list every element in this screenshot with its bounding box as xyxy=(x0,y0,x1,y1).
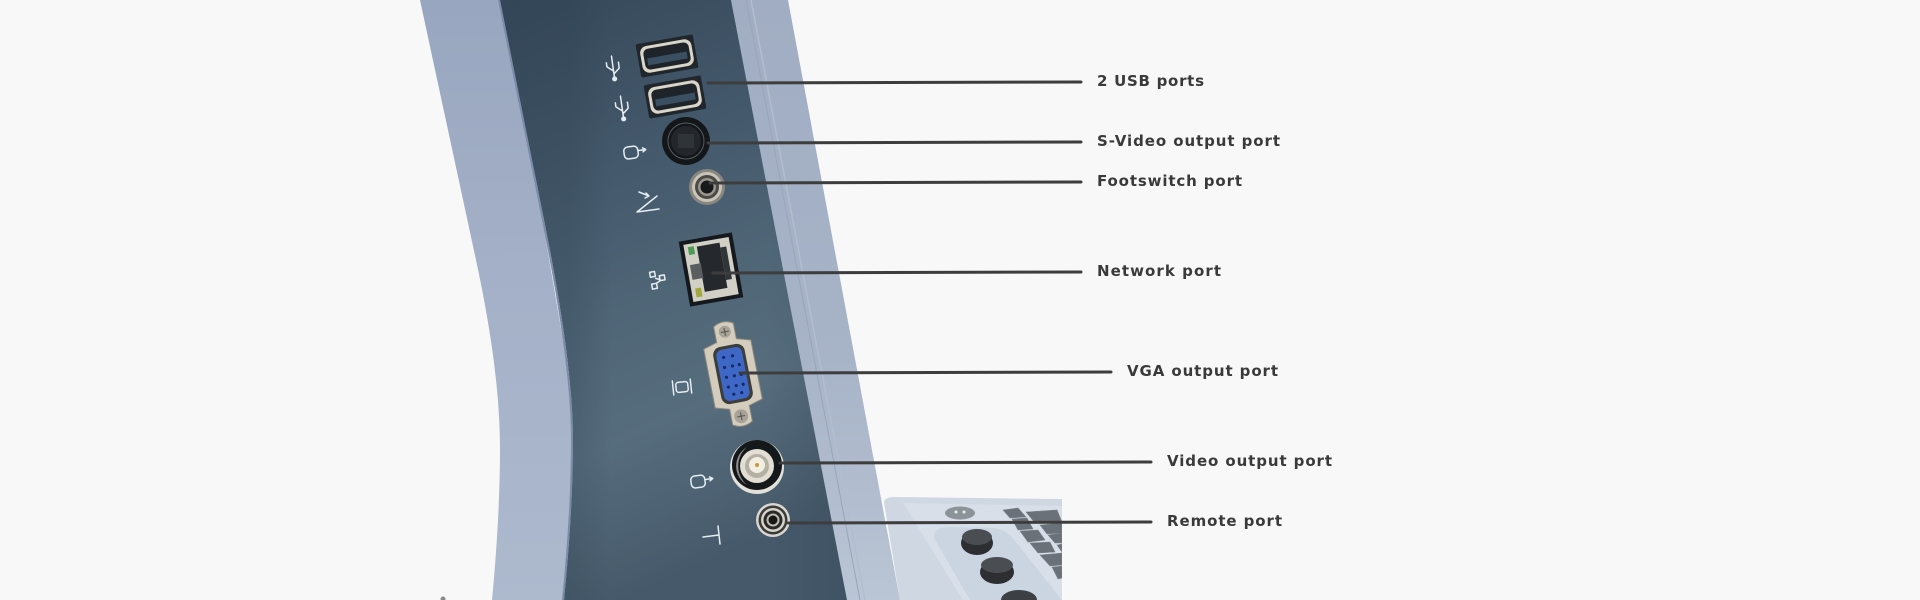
left bezel xyxy=(420,0,580,600)
icon: Network xyxy=(650,270,666,289)
port: Network RJ45 xyxy=(679,232,743,307)
callout: Footswitch port: Footswitch port xyxy=(1097,172,1242,190)
callout: 2 USB ports: 2 USB ports xyxy=(1097,72,1204,90)
icon: USB lower xyxy=(615,95,630,122)
panel side shading xyxy=(500,0,847,600)
small speck at bottom edge xyxy=(440,596,446,600)
device: ultrasound unit rear xyxy=(420,0,1062,600)
right side strip xyxy=(731,0,900,600)
icon: Footswitch xyxy=(637,192,659,212)
callout: Network port: Network port xyxy=(1097,262,1221,280)
callout: VGA output port: VGA output port xyxy=(1127,362,1278,380)
dark connector panel xyxy=(500,0,847,600)
keyboard base xyxy=(884,497,1062,600)
port: Video BNC xyxy=(730,440,784,494)
port: S-Video xyxy=(662,117,710,165)
icon: VGA monitor xyxy=(672,379,692,395)
icon: Remote xyxy=(703,526,720,544)
icon: S-Video output xyxy=(623,145,647,159)
callout: Remote port: Remote port xyxy=(1167,512,1282,530)
diagram: ultrasound unit rear port callouts xyxy=(420,0,1332,600)
port: USB lower xyxy=(643,75,707,119)
callout: Video output port: Video output port xyxy=(1167,452,1332,470)
panel edge xyxy=(499,0,572,600)
port: Remote xyxy=(756,503,790,537)
callout: S-Video output port: S-Video output port xyxy=(1097,132,1280,150)
port: VGA xyxy=(699,317,767,431)
port: USB upper xyxy=(635,34,699,78)
icon: USB upper xyxy=(606,55,621,82)
port: Footswitch xyxy=(689,169,725,205)
icon: Video output xyxy=(690,474,714,488)
